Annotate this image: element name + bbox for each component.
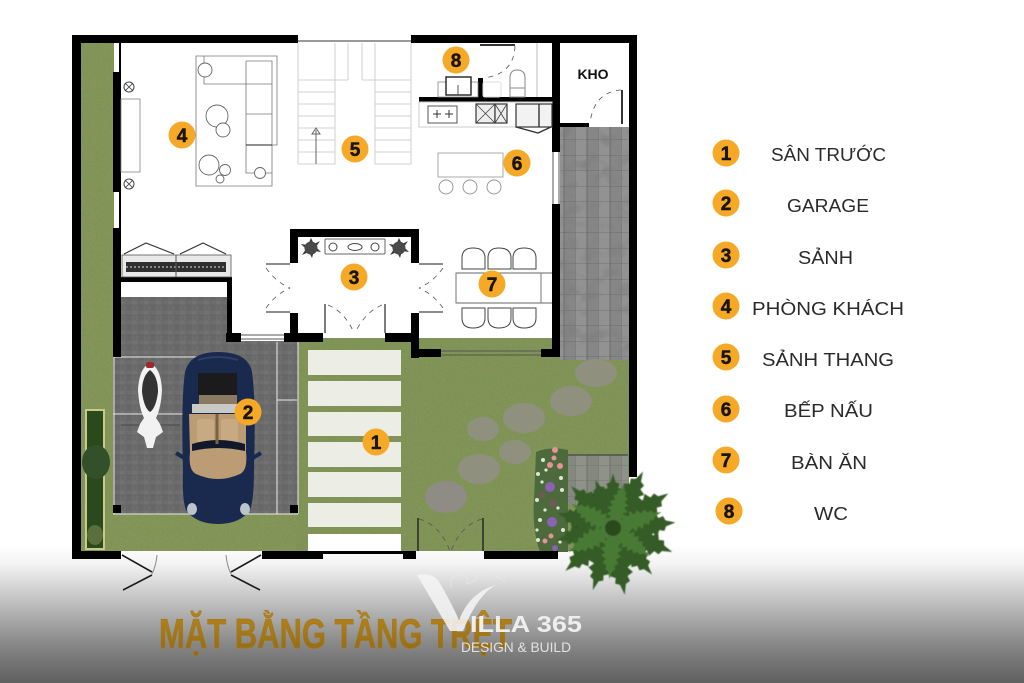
stepping stones <box>425 359 617 513</box>
marker 8 <box>442 46 470 74</box>
sofa set <box>196 56 277 186</box>
legend item 7: 7 <box>721 451 731 472</box>
foyer doors <box>266 264 443 333</box>
legend item 4: PHÒNG KHÁCH <box>752 298 904 319</box>
marker 6: 6 <box>512 154 522 175</box>
panel: floor plan <box>72 35 637 590</box>
marker 1 <box>362 428 390 456</box>
TV console <box>121 82 140 189</box>
logo mark: V <box>417 574 496 631</box>
marker 1: 1 <box>371 433 382 454</box>
foyer console and plants <box>301 238 409 258</box>
kitchen island and stools <box>438 153 503 194</box>
walkway slabs <box>308 350 401 552</box>
title: MẶT BẰNG TẦNG TRỆT <box>159 609 512 657</box>
legend item 7 <box>712 446 867 474</box>
legend item 6 <box>712 396 873 422</box>
marker 5 <box>342 136 368 162</box>
marker 7 <box>478 270 506 298</box>
marker 8: 8 <box>451 51 461 72</box>
legend item 2: 2 <box>721 194 731 215</box>
storeroom door <box>590 90 622 124</box>
shrub bed <box>82 409 110 550</box>
legend item 1: SÂN TRƯỚC <box>771 144 886 165</box>
legend <box>712 140 904 524</box>
windows <box>120 41 559 355</box>
legend item 2 <box>712 190 869 216</box>
grass: side strip <box>81 43 114 551</box>
front gate <box>122 555 261 590</box>
legend item 2: GARAGE <box>787 196 869 216</box>
legend item 8: 8 <box>724 502 734 523</box>
walls <box>72 35 637 559</box>
staircase <box>298 43 411 164</box>
marker 2 <box>234 398 262 426</box>
logo wordmark: ILLA 365 <box>470 611 582 637</box>
marker 3 <box>340 264 368 290</box>
garage storage shelf <box>122 243 231 277</box>
marker 6 <box>504 150 530 176</box>
garden gate <box>418 518 483 551</box>
paving: garage floor <box>113 297 298 514</box>
marker 5: 5 <box>350 140 361 161</box>
car <box>176 352 261 524</box>
legend item 7: BÀN ĂN <box>791 453 867 473</box>
icon: fern tree <box>553 464 679 598</box>
WC fixtures <box>438 43 537 97</box>
storeroom label: KHO <box>577 66 609 82</box>
legend item 1: 1 <box>721 144 732 165</box>
logo mark: house outline <box>451 568 506 588</box>
grass: garage front <box>105 510 300 551</box>
marker 4: 4 <box>177 126 188 147</box>
flower bed <box>534 447 568 552</box>
marker 7: 7 <box>487 275 497 296</box>
legend item 3: 3 <box>721 246 731 267</box>
legend item 5: 5 <box>721 348 732 369</box>
grass: front yard <box>298 338 629 551</box>
legend item 3 <box>712 242 853 268</box>
marker 3: 3 <box>349 268 359 289</box>
legend item 5: SẢNH THANG <box>762 349 894 370</box>
legend item 4: 4 <box>721 297 732 318</box>
motorbike <box>121 362 180 448</box>
legend item 8: WC <box>814 504 848 524</box>
legend item 5 <box>712 344 894 370</box>
kitchen counter <box>419 102 552 133</box>
bottom gradient band <box>0 545 1024 683</box>
plan number markers <box>168 46 530 456</box>
legend item 6: BẾP NẤU <box>784 400 873 421</box>
marker 2: 2 <box>243 403 253 424</box>
legend item 4 <box>712 292 904 320</box>
logo tagline: DESIGN & BUILD <box>461 639 571 655</box>
legend item 1 <box>712 140 886 166</box>
marker 4 <box>168 122 196 148</box>
paving: side yard stone <box>560 127 629 505</box>
logo: Villa 365 <box>417 568 582 655</box>
dining table and chairs <box>456 248 552 328</box>
legend item 8 <box>716 498 848 524</box>
legend item 6: 6 <box>721 400 731 421</box>
legend item 3: SẢNH <box>798 247 853 268</box>
